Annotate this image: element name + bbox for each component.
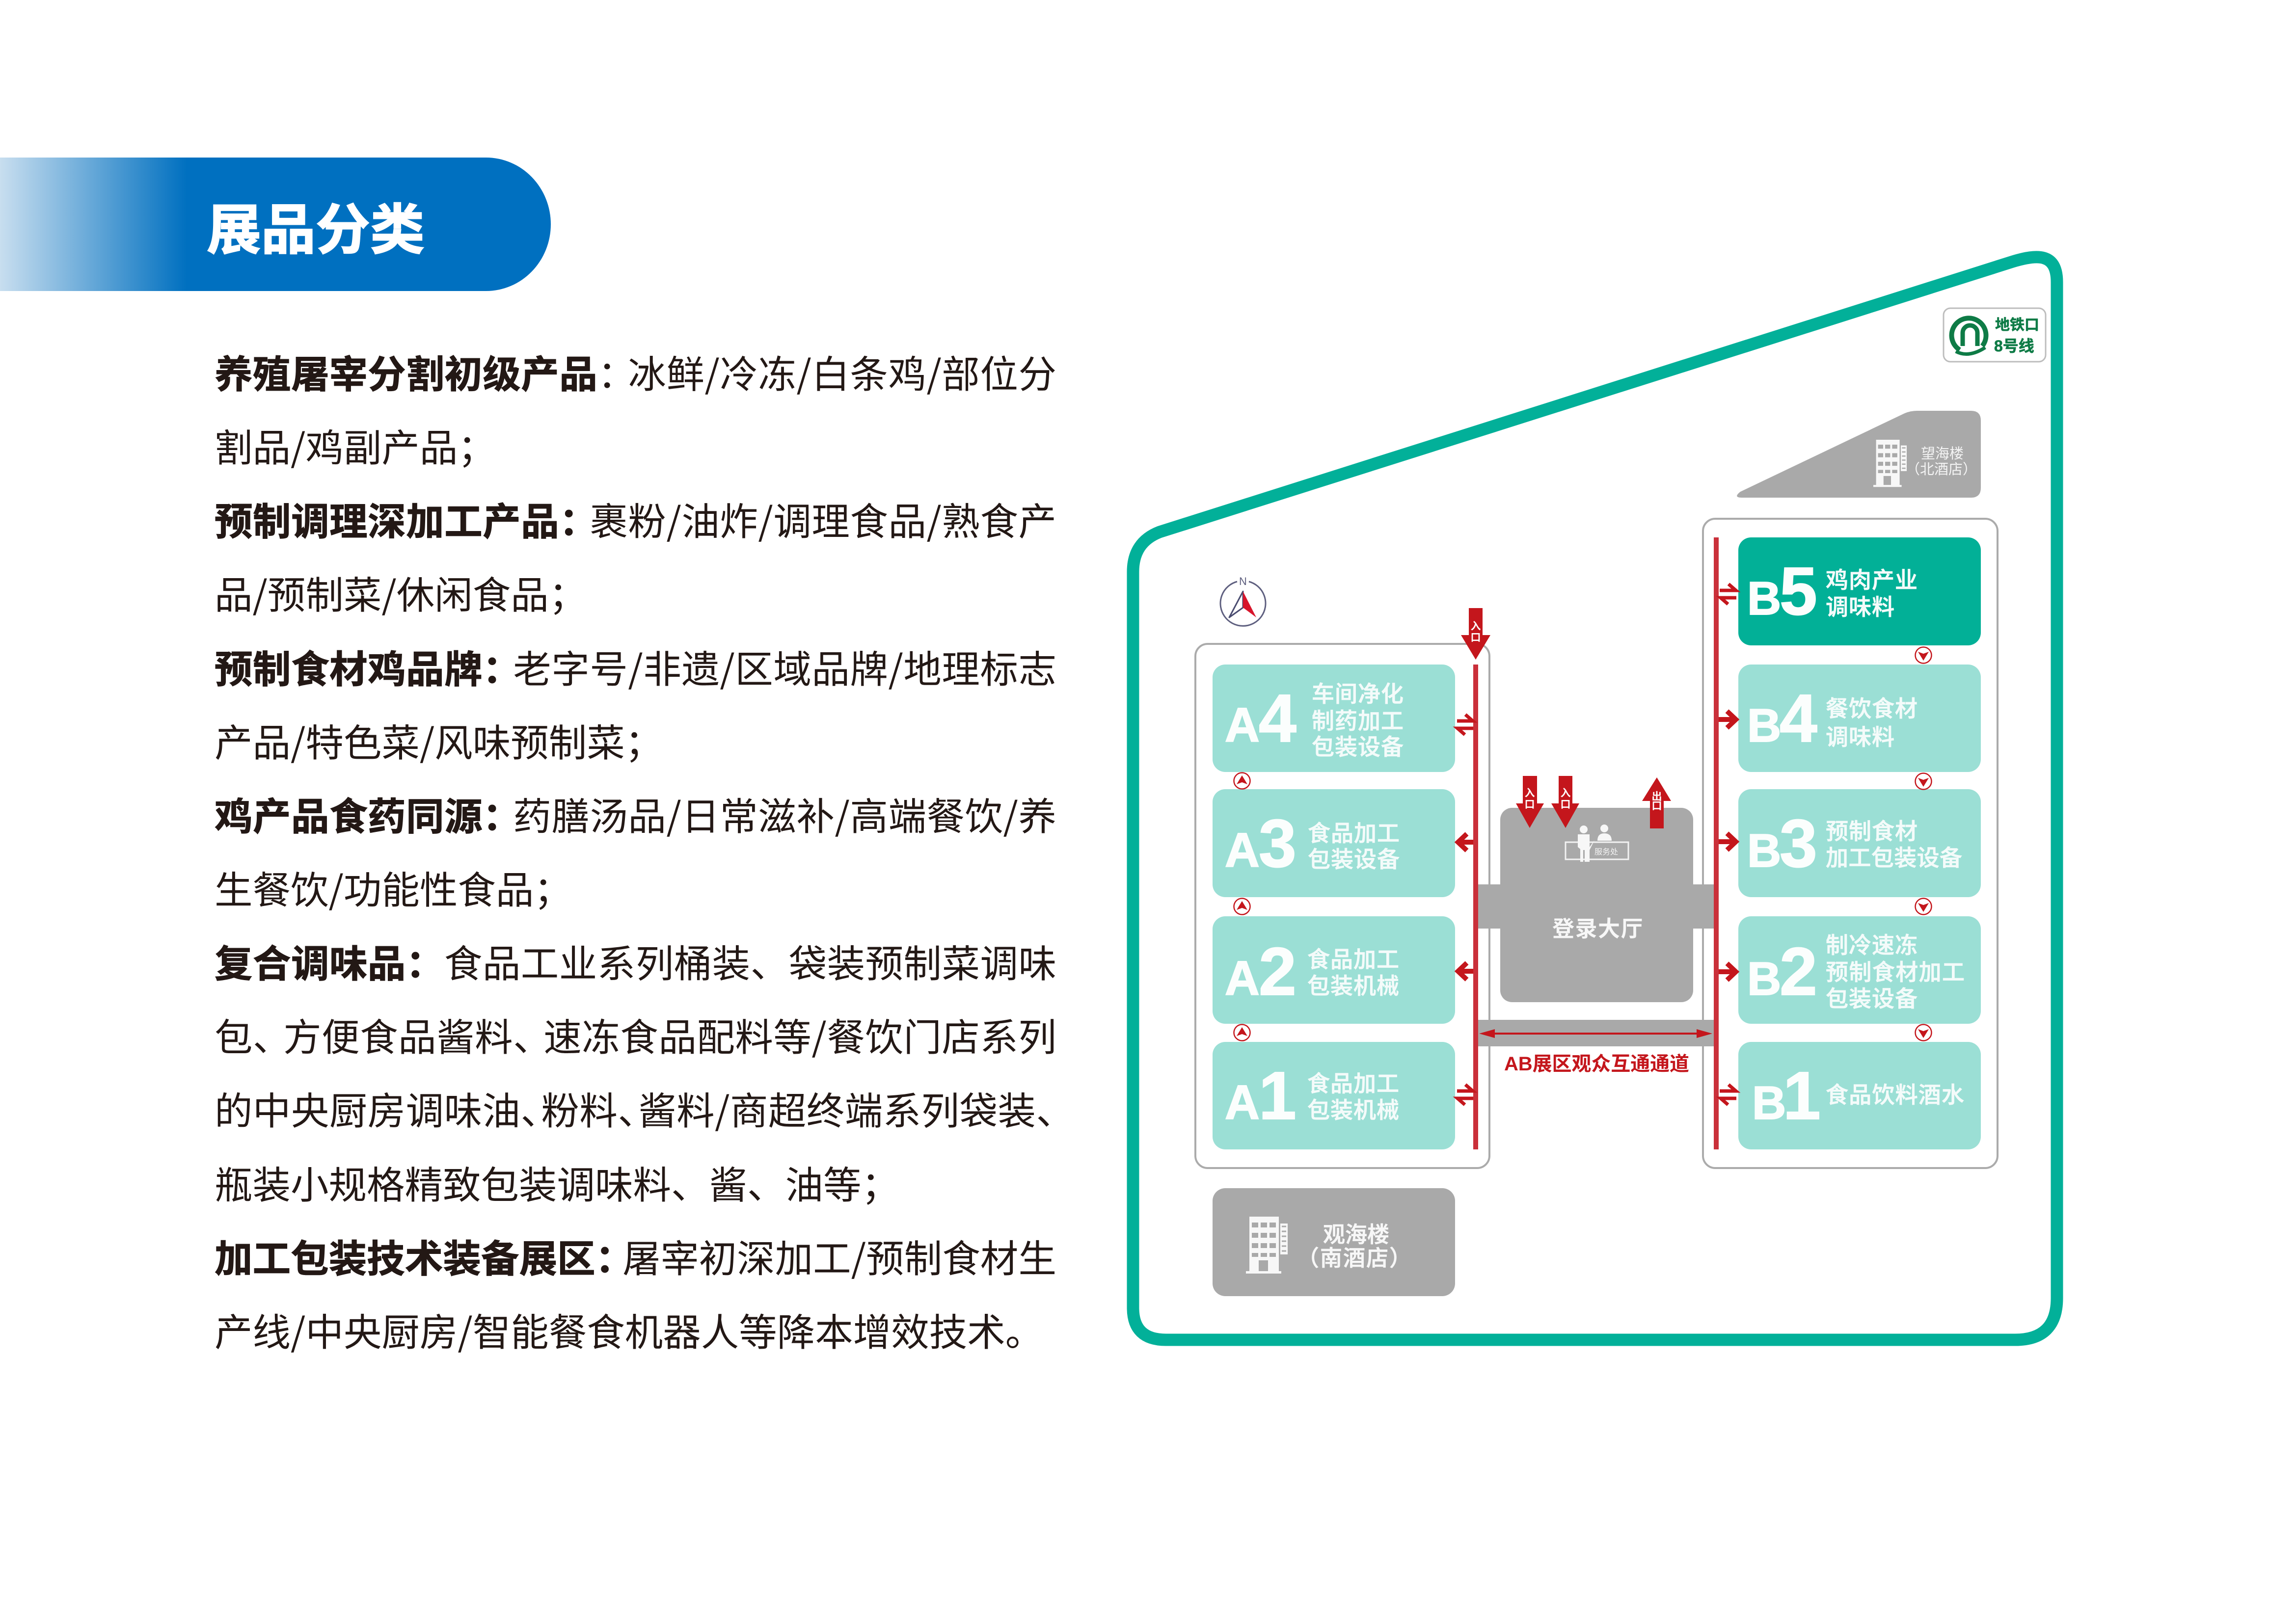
category: compound seasoning: 瓶装小规格精致包装调味料、酱、油等；: [215, 1155, 899, 1210]
zone B1: 食品饮料酒水: [1826, 1082, 1965, 1108]
zone B3: [1738, 789, 1981, 897]
icon: down marker B4-B3: [1916, 773, 1931, 789]
panel: north hotel: 望海楼: [1921, 446, 1964, 462]
zone A4: 车间净化: [1312, 681, 1404, 707]
icon: down marker B2-B1: [1916, 1025, 1931, 1040]
zone A2: A: [1225, 951, 1260, 1005]
category: processing equipment: 加工包装技术装备展区：屠宰初深加工/预制食材生: [215, 1228, 1056, 1283]
icon: down marker B5-B4: [1916, 647, 1931, 664]
icon: north hotel building: [1873, 440, 1907, 487]
panel: north hotel: [1737, 411, 1981, 498]
zone A3: [1213, 789, 1455, 897]
arrow: B5 two-way: [1720, 584, 1736, 604]
hall label: 登录大厅: [1552, 916, 1644, 941]
title: 展品分类: [207, 186, 425, 265]
icon: south hotel building: [1246, 1217, 1288, 1274]
zone B2: 2: [1780, 934, 1817, 1010]
zone A1: A: [1225, 1075, 1260, 1129]
zone B1: B: [1752, 1077, 1786, 1129]
category: deep processed products: [215, 491, 1056, 620]
icon: down marker B3-B2: [1916, 898, 1931, 915]
arrow: lobby entrance 1: 口: [1525, 799, 1535, 810]
category: primary products: [215, 344, 1056, 473]
category: primary products: 割品/鸡副产品；: [215, 418, 496, 473]
zone B5 highlighted: 调味料: [1826, 594, 1895, 620]
zone B4: 餐饮食材: [1826, 696, 1918, 721]
arrow: hall A entrance: 入: [1471, 621, 1481, 632]
zone A1: [1213, 1042, 1455, 1149]
arrow: A4 two-way: [1457, 715, 1473, 735]
zone B3: 3: [1780, 806, 1817, 881]
category: processing equipment: 产线/中央厨房/智能餐食机器人等降本增效技术。: [215, 1302, 1043, 1357]
zone A3: 食品加工: [1308, 821, 1400, 846]
arrow: lobby exit: [1642, 777, 1671, 828]
arrow: B1 two-way: [1720, 1085, 1736, 1105]
zone A4: 包装设备: [1312, 734, 1404, 760]
category: food and medicine: [215, 786, 1056, 915]
zone B3: B: [1747, 825, 1781, 877]
arrow: A3: [1458, 834, 1473, 851]
zone B4: B: [1747, 699, 1781, 752]
zone B4: [1738, 665, 1981, 772]
panel: south hotel: 观海楼: [1323, 1222, 1389, 1247]
category: food and medicine: 鸡产品食药同源：药膳汤品/日常滋补/高端餐饮/养: [215, 786, 1056, 841]
passage between halls: [1478, 1020, 1714, 1046]
heading banner: [0, 158, 551, 291]
icon: service desk: 服务处: [1594, 848, 1618, 856]
arrow: two-way passage: [1479, 1029, 1712, 1038]
arrow: lobby entrance 2: 口: [1560, 799, 1571, 810]
panel: registration hall: [1478, 808, 1714, 1002]
zone B2: 制冷速冻: [1826, 932, 1918, 958]
zone A1: 食品加工: [1307, 1071, 1400, 1096]
panel: subway sign: [1944, 308, 2046, 362]
category: deep processed products: 预制调理深加工产品：裹粉/油炸/调理食品/熟食产: [215, 491, 1056, 546]
icon: compass: [1220, 575, 1266, 626]
passage label: AB展区观众互通通道: [1504, 1053, 1689, 1075]
arrow: A1 two-way: [1457, 1085, 1473, 1105]
arrow: hall A entrance: [1461, 608, 1490, 660]
red aisle: hall A: [1473, 665, 1478, 1149]
zone A3: 3: [1259, 806, 1297, 881]
arrow: hall A entrance: 口: [1471, 632, 1481, 643]
zone B5 highlighted: [1738, 537, 1981, 645]
text block: exhibit categories: [215, 344, 1074, 1357]
icon: up marker A3-A4: [1234, 772, 1250, 789]
zone A4: 制药加工: [1312, 708, 1404, 734]
category: deep processed products: 品/预制菜/休闲食品；: [215, 565, 587, 620]
icon: up marker A2-A3: [1234, 898, 1250, 915]
category: compound seasoning: 的中央厨房调味油、粉料、酱料/商超终端系列袋装、: [215, 1081, 1074, 1136]
arrow: B4: [1719, 711, 1736, 728]
zone B4: 调味料: [1826, 724, 1895, 750]
venue outline: [1133, 257, 2057, 1340]
arrow: B2: [1719, 963, 1736, 980]
panel: south hotel: （南酒店）: [1297, 1246, 1412, 1271]
arrow: B3: [1719, 833, 1736, 850]
arrow: lobby exit: 口: [1651, 800, 1662, 812]
zone A3: 包装设备: [1308, 847, 1400, 872]
zone A2: 2: [1259, 934, 1297, 1010]
category: chicken brands: [215, 639, 1056, 768]
panel: south hotel: [1213, 1188, 1455, 1296]
zone A3: A: [1225, 823, 1260, 877]
panel: hall A outline: [1195, 644, 1489, 1168]
category: chicken brands: 产品/特色菜/风味预制菜；: [215, 713, 663, 768]
category: primary products: 养殖屠宰分割初级产品：冰鲜/冷冻/白条鸡/部位分: [215, 344, 1056, 399]
zone B2: B: [1747, 953, 1781, 1005]
zone A2: 包装机械: [1307, 973, 1400, 999]
red aisle: hall B: [1714, 537, 1719, 1149]
category: processing equipment: [215, 1228, 1056, 1357]
panel: subway sign: 地铁口: [1995, 317, 2039, 333]
icon: service desk: [1566, 825, 1628, 862]
zone B2: 预制食材加工: [1826, 959, 1965, 985]
zone A1: 包装机械: [1307, 1097, 1400, 1123]
zone A2: [1213, 916, 1455, 1024]
arrow: lobby entrance 2: 入: [1560, 788, 1571, 799]
icon: subway logo: [1952, 318, 1986, 354]
zone B2: 包装设备: [1826, 986, 1918, 1011]
zone A4: [1213, 665, 1455, 772]
zone B5 highlighted: B: [1747, 572, 1781, 625]
zone A4: 4: [1259, 681, 1297, 756]
zone B5 highlighted: 鸡肉产业: [1826, 567, 1918, 593]
zone B3: 加工包装设备: [1826, 845, 1963, 871]
panel: subway sign: 8号线: [1994, 337, 2034, 355]
arrow: lobby entrance 2: [1551, 776, 1579, 828]
zone B3: 预制食材: [1826, 819, 1918, 844]
category: compound seasoning: [215, 933, 1074, 1210]
category: compound seasoning: 包、方便食品酱料、速冻食品配料等/餐饮门店系列: [215, 1007, 1056, 1062]
icon: compass: N: [1239, 575, 1247, 587]
category: chicken brands: 预制食材鸡品牌：老字号/非遗/区域品牌/地理标志: [215, 639, 1056, 694]
zone B1: 1: [1783, 1058, 1821, 1134]
category: compound seasoning: 复合调味品：食品工业系列桶装、袋装预制菜调味: [215, 933, 1056, 988]
zone A1: 1: [1259, 1058, 1297, 1134]
panel: hall B outline: [1703, 519, 1998, 1168]
zone B1: [1738, 1042, 1981, 1149]
zone A2: 食品加工: [1307, 947, 1400, 972]
panel: north hotel: （北酒店）: [1906, 461, 1977, 478]
zone B4: 4: [1780, 681, 1817, 756]
zone B2: [1738, 916, 1981, 1024]
arrow: lobby entrance 1: [1516, 776, 1544, 828]
category: food and medicine: 生餐饮/功能性食品；: [215, 860, 572, 915]
arrow: lobby entrance 1: 入: [1525, 788, 1535, 799]
arrow: A2: [1458, 963, 1473, 980]
arrow: lobby exit: 出: [1651, 791, 1662, 802]
zone B5 highlighted: 5: [1780, 554, 1817, 629]
zone A4: A: [1225, 698, 1260, 752]
icon: up marker A1-A2: [1234, 1025, 1250, 1040]
